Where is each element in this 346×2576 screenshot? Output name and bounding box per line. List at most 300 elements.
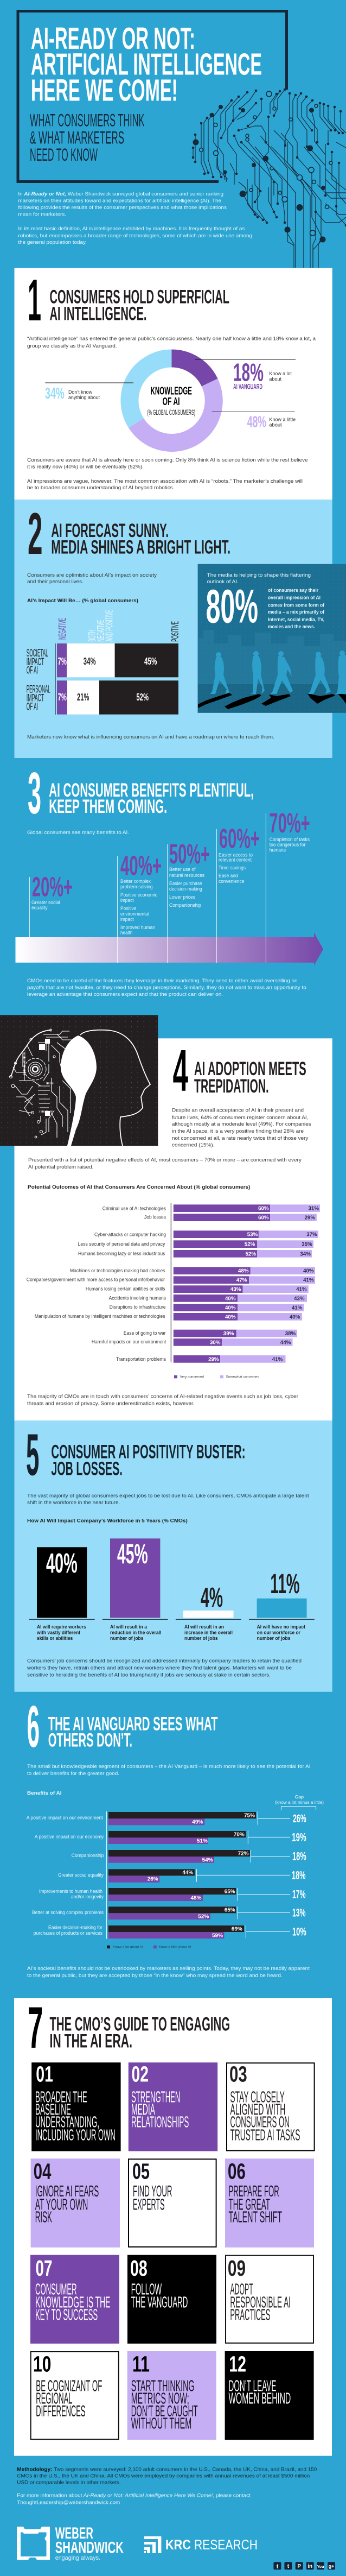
methodology text bbox=[17, 2467, 317, 2486]
stacked bar chart: impact: SOCIETAL bbox=[27, 648, 48, 659]
row labels: Companionship bbox=[72, 1853, 104, 1859]
row labels: Criminal use of AI technologies bbox=[102, 1205, 166, 1211]
panel: section 2 forecast bbox=[14, 500, 346, 758]
subtitle: NEED TO KNOW bbox=[30, 145, 98, 165]
card 01 bbox=[31, 2061, 121, 2151]
icons: social media: t bbox=[287, 2564, 290, 2569]
panel: section 1 knowledge: 1 bbox=[28, 267, 41, 333]
methodology text: Two segments were surveyed: 2,100 adult consumers in the U.S., Canada, the UK, China, and Brazil, and 150 bbox=[54, 2467, 317, 2473]
gap values: 17% bbox=[292, 1889, 306, 1901]
text: job concerns: Consumers’ job concerns should be recognized and addressed internally by company leaders to retain the qualified bbox=[27, 1658, 302, 1664]
bar values: 72% bbox=[238, 1851, 249, 1857]
card 02: RELATIONSHIPS bbox=[131, 2114, 189, 2131]
row labels bbox=[27, 648, 50, 712]
values somewhat concerned: 29% bbox=[305, 1215, 316, 1221]
step: 20%+: equality bbox=[31, 905, 48, 910]
values somewhat concerned: 41% bbox=[303, 1277, 314, 1284]
donut centre label bbox=[147, 386, 195, 416]
intro text bbox=[18, 191, 252, 245]
heading 4: TREPIDATION. bbox=[194, 1076, 269, 1097]
values very concerned: 47% bbox=[236, 1277, 247, 1284]
text: vanguard: to deliver benefits for the greater good. bbox=[27, 1771, 119, 1777]
methodology text: CMOs in the U.S., the UK and China. All CMOs were employed by companies with annual revenues of at least $500 million bbox=[17, 2473, 310, 2479]
card 02: MEDIA bbox=[131, 2101, 155, 2119]
logo: KRC Research: RESEARCH bbox=[194, 2537, 258, 2553]
row labels: Transportation problems bbox=[116, 1356, 166, 1362]
card 03: 03 bbox=[229, 2061, 247, 2086]
bars somewhat concerned bbox=[220, 1204, 320, 1363]
step: 20%+ bbox=[31, 872, 73, 910]
text: societal benefits bbox=[27, 1966, 310, 1979]
text: awareness: Consumers are aware that AI is already here or soon coming. Only 8% think AI is science fiction while the rest believe bbox=[27, 457, 308, 463]
column 45%: AI will result in a bbox=[110, 1624, 148, 1630]
row labels bbox=[27, 1815, 104, 1936]
bar chart: concerns bbox=[27, 1203, 320, 1363]
step: 20%+: Greater social bbox=[31, 900, 60, 905]
step: 40%+: environmental bbox=[120, 911, 149, 917]
stair dividers bbox=[29, 813, 266, 963]
icons: social media bbox=[273, 2562, 335, 2570]
column 40%: with vastly different bbox=[36, 1630, 80, 1635]
row labels: and/or longevity bbox=[71, 1894, 104, 1900]
panel: section 2 forecast: AND POSITIVE bbox=[104, 610, 115, 642]
bar values bbox=[148, 1813, 255, 1939]
stat description: overall impression of AI bbox=[268, 595, 321, 601]
text: concern: in the AI space, it is a very positive finding that 28% are bbox=[172, 1128, 304, 1134]
text: CMOs in touch bbox=[27, 1394, 298, 1407]
card 01: BROADEN THE bbox=[35, 2089, 87, 2106]
row labels: Harmful impacts on our environment bbox=[92, 1339, 166, 1345]
bars: personal: 7% bbox=[58, 692, 67, 703]
callout text: outlook of AI. bbox=[207, 579, 239, 585]
row labels: Humans becoming lazy or less industrious bbox=[78, 1251, 165, 1257]
text: CMOs in touch: threats and erosion of privacy. Some underestimation exists, however. bbox=[27, 1401, 194, 1407]
stat: 48% bbox=[247, 414, 296, 431]
row labels: Disruptions to infrastructure bbox=[110, 1304, 166, 1310]
card 09 bbox=[226, 2256, 313, 2343]
row labels: A positive impact on our environment bbox=[27, 1815, 103, 1821]
axis bbox=[106, 1811, 107, 1939]
bars: societal: 34% bbox=[84, 656, 96, 667]
values very concerned: 53% bbox=[247, 1232, 258, 1238]
bars: societal bbox=[57, 643, 178, 677]
icons: social media: You bbox=[317, 2565, 324, 2569]
text: job concerns: sensitive to heralding the benefits of AI too triumphantly if jobs are seriously at stake in certain sectors. bbox=[27, 1672, 271, 1678]
step: 40%+: problem-solving bbox=[120, 884, 153, 889]
values very concerned: 39% bbox=[223, 1330, 234, 1337]
card 05: FIND YOUR bbox=[133, 2183, 172, 2200]
panel: section 1 knowledge bbox=[14, 267, 332, 500]
card 07 bbox=[30, 2255, 119, 2344]
card 11: WITHOUT THEM bbox=[131, 2415, 191, 2433]
right face outline bbox=[80, 1030, 150, 1146]
heading 2: AI FORECAST SUNNY. bbox=[51, 520, 169, 541]
card 09: PRACTICES bbox=[230, 2307, 270, 2324]
stat: 34%: anything about bbox=[68, 395, 100, 400]
bars: personal bbox=[57, 680, 178, 715]
step: 70%+ bbox=[269, 807, 310, 853]
card 10: DIFFERENCES bbox=[36, 2403, 86, 2420]
values very concerned: 52% bbox=[245, 1251, 257, 1257]
text: concern bbox=[172, 1108, 311, 1148]
row labels: Better at solving complex problems bbox=[32, 1910, 104, 1916]
title frame bbox=[18, 11, 286, 181]
callout text: The media is helping to shape this flattering bbox=[207, 572, 311, 578]
methodology text: USD or comparable levels in other markets. bbox=[17, 2480, 121, 2486]
axis bbox=[170, 1203, 171, 1362]
row labels: Improvements to human health bbox=[39, 1889, 102, 1895]
callout background bbox=[198, 564, 346, 713]
bars: societal: 45% bbox=[144, 656, 157, 667]
card 02: STRENGTHEN bbox=[131, 2089, 180, 2106]
card 08: 08 bbox=[130, 2256, 148, 2281]
step: 40%+: Positive bbox=[120, 906, 137, 911]
text: negative effects: Presented with a list of potential negative effects of AI, most consumers – 70% or more – are concerned with every bbox=[28, 1157, 302, 1163]
contact text: AI-Ready or Not: Artificial Intelligence Here We Come! bbox=[83, 2493, 213, 2499]
row labels: IMPACT bbox=[27, 693, 44, 704]
values somewhat concerned: 40% bbox=[290, 1314, 300, 1320]
image: human and AI head bbox=[0, 1015, 158, 1146]
text: job expectations: shift in the workforce in the near future. bbox=[27, 1500, 120, 1506]
row labels: Greater social equality bbox=[58, 1872, 104, 1878]
values somewhat concerned: 37% bbox=[306, 1232, 317, 1238]
text: global consumers: Global consumers see many benefits to AI. bbox=[27, 830, 129, 836]
text: societal benefits: AI’s societal benefits should not be overlooked by marketers as selling points. Today, they may not be readily apparent bbox=[27, 1966, 310, 1972]
heading 2: MEDIA SHINES A BRIGHT LIGHT. bbox=[51, 536, 230, 558]
panel background bbox=[14, 1038, 332, 1420]
card 07: 07 bbox=[36, 2256, 52, 2281]
card 05 bbox=[129, 2158, 216, 2247]
section 6: vanguard bbox=[27, 1694, 324, 1979]
values very concerned: 52% bbox=[245, 1241, 255, 1248]
column 11%: AI will have no impact bbox=[257, 1624, 305, 1630]
values somewhat concerned bbox=[272, 1205, 319, 1362]
logo: Weber Shandwick: engaging always. bbox=[55, 2555, 100, 2561]
heading 2 bbox=[51, 520, 230, 558]
logo: Weber Shandwick bbox=[17, 2524, 124, 2561]
step: 50%+: Easier purchase bbox=[169, 881, 202, 886]
intro text: robotics, but encompasses a broader range of technologies, some of which are in wide use among bbox=[18, 233, 252, 239]
heading 6 bbox=[48, 1714, 218, 1751]
donut leader lines bbox=[45, 359, 296, 412]
card 02 bbox=[129, 2061, 217, 2151]
stat: 34% bbox=[45, 385, 100, 402]
heading 4 bbox=[194, 1058, 306, 1097]
panel: section 4 trepidation: 4 bbox=[173, 1037, 188, 1103]
column labels: NEGATIVE bbox=[57, 618, 68, 640]
column 11% bbox=[257, 1568, 307, 1641]
chart legend: Very concerned bbox=[180, 1376, 204, 1379]
donut centre label: OF AI bbox=[163, 396, 180, 408]
logo: KRC Research: KRC bbox=[165, 2537, 191, 2553]
bar values: 65% bbox=[225, 1889, 235, 1895]
values somewhat concerned: 43% bbox=[294, 1295, 305, 1302]
column 45%: reduction in the overall bbox=[110, 1630, 161, 1635]
step: 50%+ bbox=[169, 838, 210, 908]
row labels: purchases of products or services bbox=[34, 1930, 102, 1936]
panel background bbox=[14, 1420, 332, 1692]
text: awareness: it is reality now (40%) or will be eventually (52%). bbox=[27, 464, 144, 470]
stat description: comes from some form of bbox=[268, 602, 325, 608]
bars know a lot bbox=[108, 1812, 256, 1932]
white space between faces bbox=[61, 1036, 97, 1146]
card 06: PREPARE FOR bbox=[229, 2183, 279, 2200]
values very concerned: 43% bbox=[230, 1286, 241, 1293]
gap values: 26% bbox=[293, 1813, 306, 1825]
step: 50%+: Companionship bbox=[169, 902, 201, 908]
panel: section 7 CMO guide: INCLUDING YOUR OWN bbox=[35, 2126, 116, 2144]
step: 40%+: Improved human bbox=[120, 925, 155, 930]
column labels bbox=[57, 610, 181, 642]
icons: social media: in bbox=[307, 2564, 312, 2569]
bar values: 70% bbox=[234, 1832, 245, 1838]
text: negative effects bbox=[28, 1157, 302, 1170]
text: awareness: AI impressions are vague, however. The most common association with AI is “robots.” The marketer’s challenge will bbox=[27, 478, 303, 484]
title: HERE WE COME! bbox=[31, 73, 178, 108]
donut centre label: KNOWLEDGE bbox=[151, 386, 192, 397]
chart title: Potential Outcomes of AI that Consumers Are Concerned About (% global consumers) bbox=[28, 1184, 250, 1190]
bar values: 65% bbox=[225, 1907, 235, 1914]
panel background bbox=[14, 268, 332, 500]
values very concerned: 40% bbox=[225, 1304, 236, 1311]
icon: circuit brain bbox=[193, 90, 346, 268]
contact text: For more information about bbox=[17, 2493, 82, 2499]
step: 60%+: relevant content bbox=[219, 857, 252, 863]
values somewhat concerned: 41% bbox=[296, 1286, 307, 1293]
panel: section 7 CMO guide: 7 bbox=[28, 1995, 43, 2061]
values very concerned: 60% bbox=[258, 1205, 269, 1212]
step: 70%+: Completion of tasks bbox=[270, 837, 310, 842]
bars: personal: 52% bbox=[136, 692, 149, 703]
card 05: EXPERTS bbox=[133, 2196, 165, 2213]
column 40%: AI will require workers bbox=[37, 1624, 86, 1630]
chart title: How AI Will Impact Company’s Workforce in 5 Years (% CMOs) bbox=[27, 1518, 188, 1523]
text: optimistic bbox=[27, 572, 157, 585]
card 01: BASELINE bbox=[35, 2101, 71, 2119]
gap values: 18% bbox=[292, 1851, 306, 1863]
card 10 bbox=[31, 2352, 119, 2439]
column 45% bbox=[110, 1538, 161, 1641]
column 40% bbox=[36, 1547, 87, 1641]
callout text bbox=[207, 572, 311, 585]
stat: 18%: AI VANGUARD bbox=[233, 382, 262, 391]
stat: 48%: 48% bbox=[247, 414, 266, 431]
chart legend bbox=[107, 1946, 191, 1949]
intro text: marketers on their attitudes toward and expectations for artificial intelligence (AI). The bbox=[18, 198, 221, 204]
text: concern: future lives, 64% of consumers register concern about AI, bbox=[172, 1115, 308, 1121]
heading 5 bbox=[51, 1442, 246, 1480]
column 11%: 11% bbox=[270, 1568, 299, 1599]
stat: 48%: about bbox=[269, 422, 282, 428]
row labels: Machines or technologies making bad choices bbox=[70, 1268, 165, 1274]
column 45%: number of jobs bbox=[110, 1636, 143, 1641]
section 3: benefits bbox=[15, 760, 323, 997]
card 03: STAY CLOSELY bbox=[230, 2089, 285, 2106]
gap values: 10% bbox=[292, 1925, 306, 1938]
card 09: 09 bbox=[228, 2256, 246, 2281]
panel: media callout bbox=[198, 564, 346, 713]
card 09: ADOPT bbox=[230, 2281, 253, 2298]
values very concerned: 48% bbox=[238, 1268, 249, 1274]
row labels: Ease of going to war bbox=[124, 1330, 166, 1336]
step: 40%+ bbox=[120, 850, 162, 936]
title: AI-READY OR NOT: bbox=[31, 21, 195, 56]
step: 70%+: humans bbox=[270, 847, 286, 853]
row labels: Job losses bbox=[144, 1214, 166, 1220]
shadows of walkers bbox=[198, 693, 346, 709]
text: vanguard: The small but knowledgeable segment of consumers – the AI Vanguard – is much more likely to see the potential for AI bbox=[27, 1764, 310, 1770]
chart legend: Somewhat concerned bbox=[226, 1376, 259, 1379]
donut chart bbox=[130, 358, 214, 443]
card 04: AT YOUR OWN bbox=[35, 2196, 88, 2213]
heading 3: KEEP THEM COMING. bbox=[49, 796, 167, 817]
values very concerned: 40% bbox=[225, 1295, 236, 1302]
card 12: 12 bbox=[229, 2352, 246, 2377]
values somewhat concerned: 35% bbox=[302, 1241, 312, 1248]
card 11: 11 bbox=[132, 2352, 150, 2377]
card 05: 05 bbox=[132, 2158, 150, 2183]
text: concern: not concerned at all, a rate nearly twice that of those very bbox=[172, 1135, 309, 1141]
icons: social media: g+ bbox=[329, 2564, 334, 2569]
card 12 bbox=[225, 2351, 314, 2440]
step: 50%+: Lower prices bbox=[169, 894, 195, 900]
card 04: 04 bbox=[34, 2158, 52, 2183]
ground band bbox=[198, 684, 346, 713]
logo: Weber Shandwick: SHANDWICK bbox=[55, 2539, 124, 2557]
step: 60%+: Ease and bbox=[219, 873, 238, 879]
card 08 bbox=[127, 2255, 216, 2344]
text: optimistic: and their personal lives. bbox=[27, 579, 84, 585]
values somewhat concerned: 41% bbox=[272, 1356, 283, 1362]
step: 40%+: impact bbox=[120, 898, 134, 903]
card 08: FOLLOW bbox=[131, 2281, 162, 2298]
column 11%: number of jobs bbox=[257, 1636, 291, 1641]
step: 40%+: 40%+ bbox=[120, 850, 162, 881]
values very concerned bbox=[208, 1205, 269, 1362]
row labels: OF AI bbox=[27, 701, 38, 712]
values very concerned: 40% bbox=[225, 1314, 236, 1320]
text: job expectations: The vast majority of global consumers expect jobs to be lost due to AI. Like consumers, CMOs anticipate a large talent bbox=[27, 1493, 309, 1499]
card 04 bbox=[31, 2158, 120, 2247]
methodology text: Methodology: bbox=[17, 2467, 52, 2473]
text: CMOs careful: leverage an advantage that consumers expect and that the product can deliver on. bbox=[27, 992, 223, 997]
stat: 48%: Know a little bbox=[269, 417, 296, 422]
stat: 34%: Don’t know bbox=[68, 389, 92, 395]
column 40%: skills or abilities bbox=[37, 1636, 73, 1641]
heading 3 bbox=[49, 780, 254, 817]
card 11: START THINKING bbox=[131, 2377, 194, 2395]
heading 5: JOB LOSSES. bbox=[51, 1459, 123, 1480]
row labels: IMPACT bbox=[27, 656, 44, 668]
card 06: THE GREAT bbox=[229, 2196, 270, 2213]
step: 40%+: Better complex bbox=[120, 879, 151, 884]
row labels bbox=[27, 1205, 166, 1362]
step: 70%+: 70%+ bbox=[269, 807, 310, 838]
values very concerned: 30% bbox=[210, 1339, 221, 1346]
card 04: RISK bbox=[35, 2209, 52, 2226]
text: concern: although mostly at a moderate level (49%). For companies bbox=[172, 1121, 311, 1127]
card 06: TALENT SHIFT bbox=[229, 2209, 282, 2226]
step: 70%+: too dangerous for bbox=[270, 842, 306, 847]
stat: 18%: Know a lot bbox=[269, 371, 292, 376]
column labels: BOTH bbox=[87, 630, 98, 642]
contact text: , please contact bbox=[213, 2493, 251, 2499]
card 07: KNOWLEDGE IS THE bbox=[35, 2294, 110, 2311]
heading 6: OTHERS DON’T. bbox=[48, 1730, 132, 1751]
text: negative effects: AI potential problem raised. bbox=[28, 1164, 93, 1170]
step: 60%+ bbox=[219, 823, 260, 884]
subtitle: & WHAT MARKETERS bbox=[30, 128, 124, 147]
subtitle bbox=[30, 110, 145, 165]
column 40%: 40% bbox=[46, 1548, 78, 1579]
card 08: THE VANGUARD bbox=[131, 2294, 188, 2311]
intro text: mean for marketers. bbox=[18, 212, 66, 218]
panel: section 4 trepidation bbox=[0, 1015, 332, 1420]
step: 50%+: Better use of bbox=[169, 867, 196, 872]
step: 50%+: natural resources bbox=[169, 873, 204, 878]
chart title: AI’s Impact Will Be… (% global consumers) bbox=[27, 598, 138, 603]
card 04: IGNORE AI FEARS bbox=[35, 2183, 99, 2200]
step: 60%+: Easier access to bbox=[219, 852, 253, 857]
section 6: vanguard: 6 bbox=[27, 1694, 40, 1760]
text: roadmap: Marketers now know what is influencing consumers on AI and have a roadmap on where to reach them. bbox=[27, 734, 274, 740]
bars very concerned bbox=[174, 1204, 270, 1363]
column 11%: on our workforce or bbox=[257, 1630, 300, 1635]
panel background bbox=[14, 500, 332, 758]
contact text bbox=[17, 2493, 251, 2506]
card 12: DON’T LEAVE bbox=[229, 2377, 276, 2395]
card 11 bbox=[127, 2351, 216, 2440]
card 10: REGIONAL bbox=[36, 2390, 73, 2408]
gap values bbox=[292, 1813, 306, 1938]
gap values: 19% bbox=[292, 1831, 306, 1843]
stat: 80%: 80% bbox=[206, 580, 258, 633]
axis bbox=[55, 643, 56, 715]
section 3: benefits: 3 bbox=[28, 760, 41, 826]
row labels: OF AI bbox=[27, 665, 38, 677]
stat: 18%: 18% bbox=[233, 358, 264, 387]
text: intro bbox=[27, 336, 316, 349]
bar values: 44% bbox=[182, 1870, 194, 1876]
bar values: 49% bbox=[192, 1819, 203, 1825]
chart legend bbox=[174, 1375, 259, 1379]
text: CMOs in touch: The majority of CMOs are in touch with consumers’ concerns of AI-related negative events such as job loss, cyber bbox=[27, 1394, 298, 1400]
row labels: A positive impact on our economy bbox=[35, 1834, 104, 1840]
text: concern: concerned (15%). bbox=[172, 1142, 215, 1148]
intro text: following provides the results of the consumer perspectives and what those implications bbox=[18, 205, 227, 211]
heading 7: IN THE AI ERA. bbox=[50, 2031, 132, 2052]
card 10: 10 bbox=[33, 2352, 51, 2377]
step: 50%+: 50%+ bbox=[169, 838, 210, 869]
logo: Weber Shandwick: WEBER bbox=[55, 2524, 93, 2542]
bars: personal: 21% bbox=[77, 692, 89, 703]
heading 1 bbox=[50, 286, 229, 324]
column 4% bbox=[183, 1582, 233, 1641]
text: CMOs careful: payoffs that are not feasible, or they need to change perceptions. Similarly, they do not want to miss an opportunity to bbox=[27, 985, 306, 991]
icons: social media: P bbox=[297, 2564, 301, 2569]
gap values: 13% bbox=[292, 1906, 306, 1919]
gap header bbox=[275, 1794, 324, 1810]
panel: section 7 CMO guide bbox=[14, 1995, 332, 2456]
text: awareness: be to broaden consumer understanding of AI beyond robotics. bbox=[27, 485, 174, 491]
text: intro: “Artificial intelligence” has entered the general public’s consciousness. Nearly one half know a little and 18% know a lot, a bbox=[27, 336, 316, 342]
column chart: workforce bbox=[29, 1538, 315, 1641]
row labels: Easier decision-making for bbox=[48, 1925, 102, 1931]
bar values: 59% bbox=[212, 1933, 223, 1939]
baselines bbox=[29, 1619, 315, 1620]
values somewhat concerned: 40% bbox=[303, 1268, 314, 1274]
bar values: 52% bbox=[198, 1914, 209, 1920]
